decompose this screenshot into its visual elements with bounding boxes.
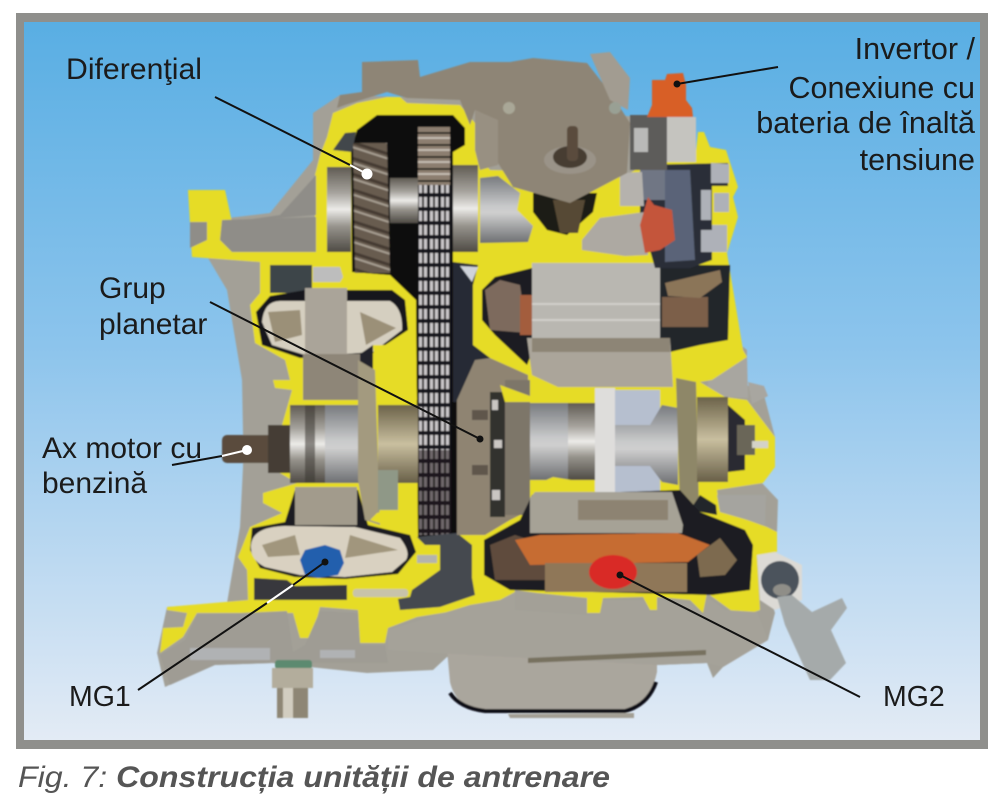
MG2 copper winding	[515, 533, 710, 565]
dark blue casting behind chain	[453, 262, 490, 402]
red marker MG2	[589, 555, 637, 589]
lower gray ribs	[160, 611, 388, 685]
label: Invertor: Conexiune cu	[788, 71, 975, 105]
MG2 lower cavity	[484, 490, 753, 595]
inverter cavity	[640, 163, 728, 268]
MG1 lower winding	[251, 526, 408, 577]
label: MG2: MG2	[883, 681, 945, 713]
label: Ax motor cu benzină: Ax motor cu	[42, 432, 202, 465]
upper MG2 cavity	[482, 268, 535, 365]
MG2 brown core	[545, 563, 687, 592]
upper flange gray pockets	[190, 217, 316, 252]
MG2 right lump	[697, 538, 737, 577]
upper MG2 stator	[532, 263, 660, 338]
valve body	[337, 58, 630, 203]
MG1 upper winding	[262, 301, 402, 355]
MG1 lower cavity	[254, 578, 347, 600]
yellow cast section	[160, 97, 777, 653]
silver connector post	[667, 117, 696, 162]
sensor port ring	[757, 552, 802, 610]
left differential cylinder	[327, 167, 351, 252]
drive unit cutaway	[157, 52, 847, 718]
MG1 upper stator cavity	[256, 290, 408, 358]
blue marker MG1	[300, 545, 344, 578]
leader: Diferențial	[215, 97, 372, 180]
housing silhouette	[157, 95, 778, 687]
valve knob	[544, 126, 596, 174]
planetary group	[457, 358, 530, 535]
label: Ax motor cu benzină: benzină	[42, 467, 147, 500]
orange high-voltage connector	[647, 73, 693, 117]
label: MG1: MG1	[69, 681, 131, 713]
MG2 shaft	[530, 403, 552, 480]
leader: MG1	[138, 558, 328, 690]
upper MG2 lower block	[527, 338, 673, 387]
gray-blue cavity below planetary	[398, 533, 475, 610]
label: Grup planetar: Grup	[99, 272, 166, 305]
label: Invertor: Invertor /	[855, 32, 976, 66]
leader: Grup planetar	[210, 302, 484, 442]
middle differential cylinder	[390, 178, 418, 223]
upper MG2 left winding	[485, 280, 527, 333]
label: Diferențial: Diferenţial	[66, 53, 202, 86]
label: Invertor: tensiune	[860, 143, 975, 177]
gray block at right edge	[708, 355, 768, 404]
leader: Invertor	[674, 67, 778, 88]
chain	[418, 127, 450, 187]
caption: Fig. 7: Construcția unității de antrenare	[18, 761, 610, 794]
leader: MG2	[616, 572, 860, 697]
right steel sleeve	[480, 176, 533, 243]
yellow collar above planetary side	[530, 477, 590, 515]
upper MG2 right winding	[662, 297, 708, 327]
inverter gray body	[620, 172, 644, 206]
valve shaft cavity	[533, 193, 597, 235]
MG2 ring and bearing	[676, 378, 699, 510]
main shaft, MG1 side	[222, 435, 278, 463]
right differential cylinder	[453, 165, 478, 252]
inverter windows	[701, 163, 729, 252]
tan disc	[358, 360, 380, 525]
MG2 left winding	[490, 535, 545, 580]
red inverter connector	[640, 197, 675, 253]
yellow wedges near chain	[370, 345, 417, 530]
valve bracket	[590, 52, 630, 110]
label: Grup planetar: planetar	[99, 308, 207, 341]
sensor	[777, 595, 847, 680]
MG1 lower stator cavity	[250, 490, 416, 579]
drain plug	[272, 660, 313, 718]
differential black cavity	[351, 115, 465, 538]
label: Invertor: bateria de înaltă	[756, 106, 975, 140]
MG2 top block	[530, 492, 683, 533]
leader: Ax motor cu benzină	[172, 445, 252, 465]
oil pan	[447, 650, 657, 711]
differential gear	[353, 143, 390, 273]
